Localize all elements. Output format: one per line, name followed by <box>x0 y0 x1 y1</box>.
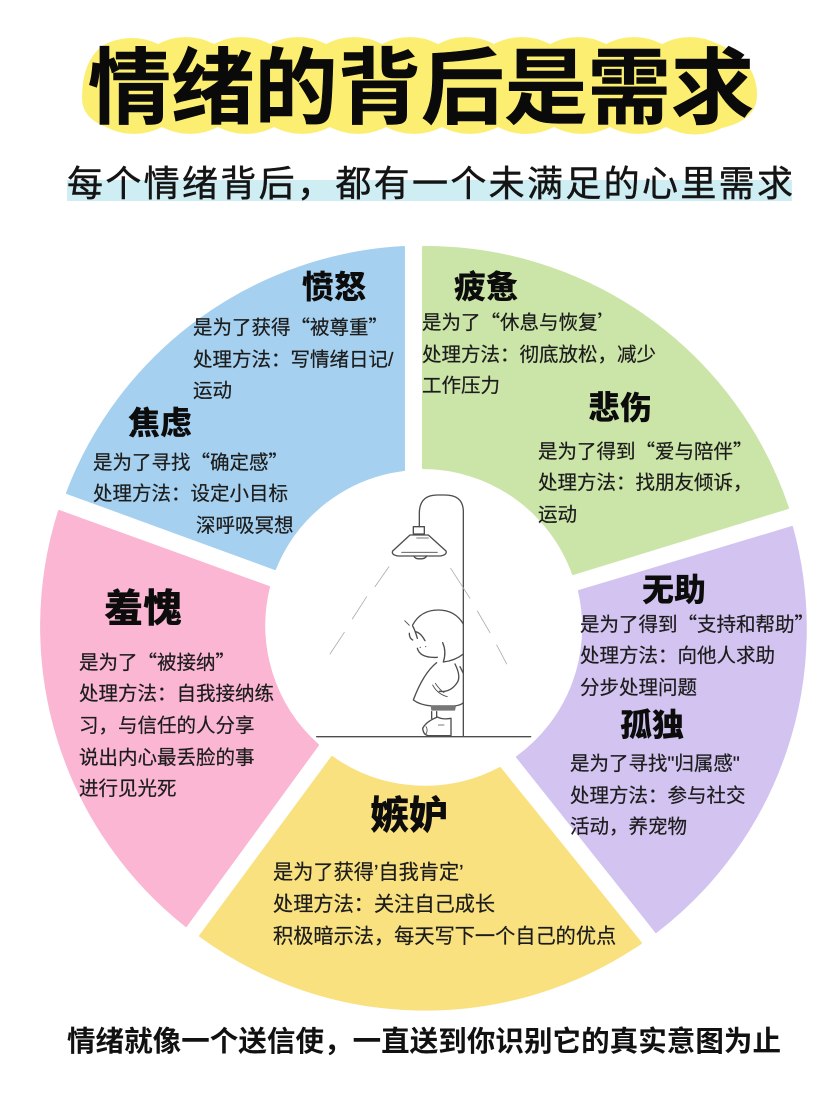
shame text: 是为了“被接纳” <box>79 646 235 675</box>
sadness text: 是为了得到“爱与陪伴” <box>538 435 753 464</box>
anger text: 是为了获得“被尊重” <box>193 311 388 340</box>
subtitle text: 每个情绪背后，都有一个未满足的心里需求 <box>67 163 793 204</box>
subtitle <box>67 163 793 204</box>
title highlight blob <box>82 37 757 134</box>
shame text: 处理方法：自我接纳练 <box>79 683 274 705</box>
shame text: 习，与信任的人分享 <box>79 715 255 737</box>
loneliness text: 处理方法：参与社交 <box>570 785 746 807</box>
sadness text: 运动 <box>538 504 577 526</box>
anxiety text: 处理方法：设定小目标 <box>93 483 288 505</box>
helplessness text: 处理方法：向他人求助 <box>580 645 775 667</box>
loneliness text: 活动，养宠物 <box>570 816 687 838</box>
jealousy text: 是为了获得’自我肯定’ <box>273 861 464 884</box>
panel: helplessness and loneliness <box>517 527 814 932</box>
heading: sadness: 悲伤 <box>588 390 652 426</box>
panel: jealousy <box>200 757 641 1010</box>
helplessness text: 分步处理问题 <box>580 677 697 699</box>
helplessness text: 是为了得到“支持和帮助” <box>580 608 814 637</box>
subtitle highlight band <box>67 180 792 201</box>
heading: anger: 愤怒 <box>302 269 366 305</box>
footer message: 情绪就像一个送信使，一直送到你识别它的真实意图为止 <box>67 1026 781 1058</box>
fatigue text: 是为了“休息与恢复’ <box>422 306 617 335</box>
fatigue text: 处理方法：彻底放松，减少 <box>422 344 656 366</box>
panel: anger and anxiety <box>67 247 404 569</box>
heading: shame: 羞愧 <box>104 588 182 631</box>
heading: fatigue: 疲惫 <box>454 269 518 305</box>
anger text: 运动 <box>193 380 232 402</box>
heading: anxiety: 焦虑 <box>128 405 192 441</box>
icon: street lamp <box>392 495 463 736</box>
anxiety text: 深呼吸冥想 <box>196 515 294 537</box>
panel: shame <box>41 511 318 926</box>
icon: child <box>405 610 463 736</box>
heading: jealousy: 嫉妒 <box>370 795 448 838</box>
title <box>82 37 757 135</box>
ground line <box>317 735 531 739</box>
jealousy text: 处理方法：关注自己成长 <box>273 893 495 916</box>
loneliness text: 是为了寻找"归属感" <box>570 753 740 775</box>
sadness text: 处理方法：找朋友倾诉， <box>538 472 753 494</box>
jealousy text: 积极暗示法，每天写下一个自己的优点 <box>273 925 616 948</box>
illustration: child under street lamp <box>317 495 531 737</box>
fatigue text: 工作压力 <box>422 375 500 397</box>
light rays <box>330 567 507 664</box>
heading: helplessness: 无助 <box>642 572 706 608</box>
title text: 情绪的背后是需求 <box>88 42 754 135</box>
shame text: 说出内心最丢脸的事 <box>79 747 255 769</box>
anxiety text: 是为了寻找“确定感” <box>93 446 288 475</box>
panel: fatigue and sadness <box>422 247 788 574</box>
shame text: 进行见光死 <box>79 778 177 800</box>
emotion wheel <box>41 247 814 1010</box>
heading: loneliness: 孤独 <box>620 707 684 743</box>
anger text: 处理方法：写情绪日记/ <box>193 349 394 371</box>
